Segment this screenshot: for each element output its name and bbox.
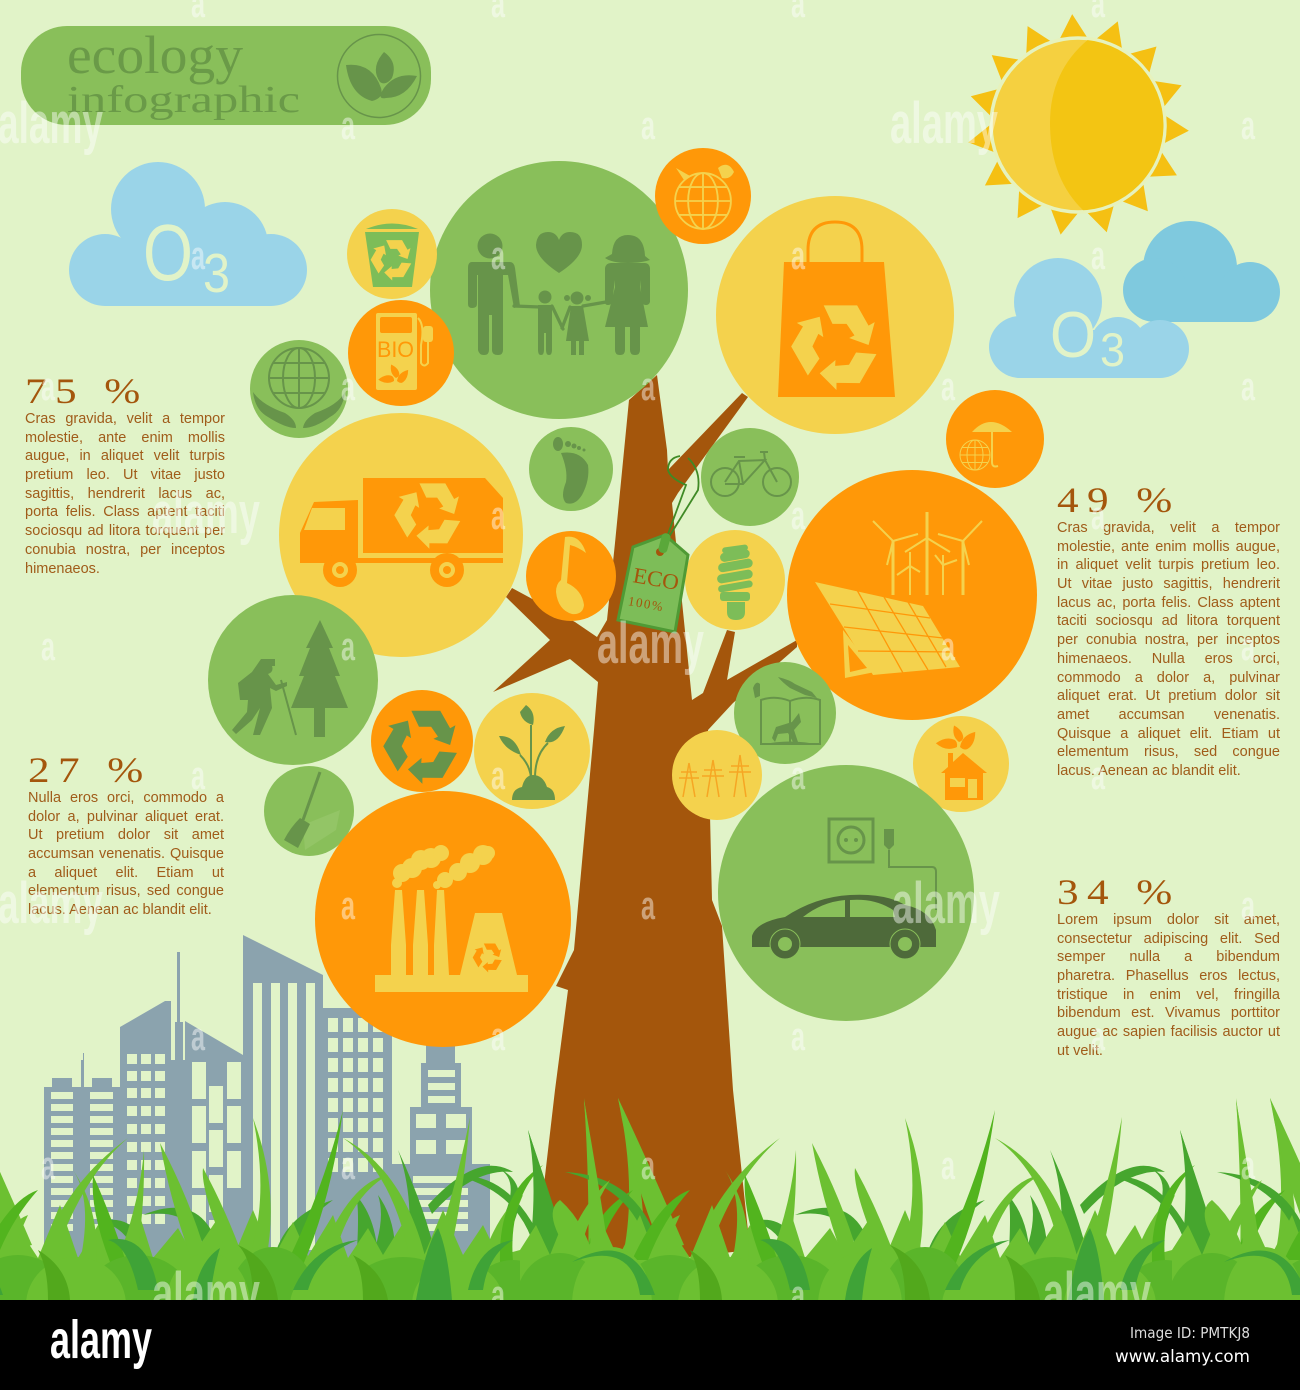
text block: 75 percent: 75 % (25, 371, 149, 411)
watermark overlay: a (41, 1144, 55, 1188)
eco tag: ECO (631, 562, 681, 595)
circle: bicycle (701, 428, 799, 526)
title pill (21, 25, 431, 125)
watermark overlay: a (941, 365, 955, 409)
text block: 75 percent: pretium leo. Ut vitae justo (25, 467, 225, 483)
watermark overlay: a (1241, 625, 1255, 669)
watermark overlay: alamy (152, 1261, 260, 1326)
watermark overlay: a (641, 104, 655, 148)
circle: hiker and tree (208, 595, 378, 765)
text block: 49 percent: aliquet erat. Ut pretium dolor sit (1057, 688, 1280, 704)
icon: leaves emblem (338, 34, 420, 118)
circle: footprint (529, 427, 613, 511)
circle: umbrella and globe (946, 390, 1044, 488)
cloud: ozone right (989, 258, 1189, 378)
text block: 49 percent: taciti sociosqu ad litora torquent (1057, 613, 1280, 629)
watermark overlay: a (491, 1015, 505, 1059)
circle: music note leaf (526, 531, 616, 621)
footer: url: www.alamy.com (1115, 1347, 1250, 1367)
circle: recycling truck (279, 413, 523, 657)
watermark overlay: a (791, 754, 805, 798)
text block: 27 percent: Ut pretium dolor sit amet (28, 827, 224, 843)
watermark overlay: a (341, 365, 355, 409)
watermark overlay: a (341, 104, 355, 148)
cloud: ozone right: 3 (1100, 323, 1125, 376)
text block: 49 percent: in aliquet velit turpis pretium leo. (1057, 557, 1280, 573)
text block: 27 percent: dolor a, pulvinar aliquet erat. (28, 809, 224, 825)
tree: trunk and branches (493, 375, 797, 1265)
text block: 49 percent: Quisque a aliquet elit. Etiam ut (1057, 726, 1280, 742)
watermark overlay: a (941, 625, 955, 669)
watermark overlay: a (641, 884, 655, 928)
watermark overlay: a (791, 234, 805, 278)
watermark overlay: a (41, 625, 55, 669)
footer bar (0, 1300, 1300, 1390)
text block: 34 percent: ut velit. (1057, 1043, 1103, 1059)
circle: energy saving bulb (685, 530, 785, 630)
text block: 49 percent: himenaeos. Nulla eros orci, (1057, 651, 1280, 667)
watermark overlay: a (491, 494, 505, 538)
eco tag: 100% (627, 593, 665, 614)
watermark overlay: a (1241, 365, 1255, 409)
text block: 27 percent: accumsan venenatis. Quisque (28, 846, 224, 862)
text block: 75 percent: conubia nostra, per inceptos (25, 542, 225, 558)
circle: recycling (371, 690, 473, 792)
watermark overlay: alamy (890, 91, 998, 156)
circle: globe in hands (250, 340, 348, 438)
circle: globe and wildlife (655, 148, 751, 244)
text block: 34 percent: semper nulla a bibendum (1057, 949, 1280, 965)
watermark overlay: a (191, 234, 205, 278)
circle: family (430, 161, 688, 419)
text block: 49 percent: commodo a dolor a, pulvinar (1057, 670, 1280, 686)
watermark overlay: alamy (0, 871, 103, 936)
watermark overlay: a (491, 234, 505, 278)
text block: 75 percent (25, 371, 225, 576)
text block: 34 percent: 34 % (1057, 872, 1181, 912)
circle: power pylons (672, 730, 762, 820)
watermark overlay: a (491, 1273, 505, 1317)
circle: electric car (718, 765, 974, 1021)
footer: logo: alamy (50, 1310, 152, 1370)
watermark overlay: a (1241, 884, 1255, 928)
text block: 49 percent: Cras gravida, velit a tempor (1057, 520, 1280, 536)
title: ecology: ecology (67, 25, 243, 85)
text block: 27 percent (28, 750, 224, 918)
text block: 75 percent: Cras gravida, velit a tempor (25, 411, 225, 427)
cloud: ozone left: 3 (203, 242, 230, 304)
sun (966, 13, 1200, 237)
city skyline (44, 935, 490, 1290)
watermark overlay: alamy (597, 611, 704, 676)
text block: 27 percent: Nulla eros orci, commodo a (28, 790, 224, 806)
circle: bio fuel: BIO (377, 337, 414, 362)
text block: 75 percent: sagittis, hendrerit lacus ac, (25, 486, 225, 502)
text block: 49 percent: per conubia nostra, per inceptos (1057, 632, 1280, 648)
watermark overlay: a (941, 1144, 955, 1188)
circle: solar panel and wind turbines (787, 470, 1037, 720)
text block: 27 percent: 27 % (28, 750, 152, 790)
watermark overlay: a (641, 365, 655, 409)
text block: 49 percent: 49 % (1057, 480, 1181, 520)
eco tag (618, 456, 699, 632)
watermark overlay: a (1091, 234, 1105, 278)
text block: 34 percent: augue ac sapien facilisis auctor ut (1057, 1024, 1280, 1040)
text block: 27 percent: a aliquet elit. Etiam ut (28, 865, 224, 881)
watermark overlay: a (41, 365, 55, 409)
watermark overlay: a (1241, 1144, 1255, 1188)
text block: 49 percent: molestie, ante enim mollis augue, (1057, 539, 1280, 555)
text block: 34 percent: consectetur adipiscing elit. Sed (1057, 931, 1280, 947)
circle: recycling bin (347, 209, 437, 299)
cloud: ozone left (69, 162, 307, 306)
watermark overlay: a (791, 1273, 805, 1317)
watermark overlay: alamy (152, 481, 260, 546)
watermark overlay: alamy (892, 871, 1000, 936)
watermark overlay: alamy (0, 91, 103, 156)
cloud: ozone left: O (143, 208, 193, 297)
text block: 34 percent: bibendum est. Vivamus porttitor (1057, 1005, 1280, 1021)
cloud: rear right (1123, 221, 1280, 322)
watermark overlay: a (1091, 494, 1105, 538)
text block: 34 percent: Lorem ipsum dolor sit amet, (1057, 912, 1280, 928)
text block: 49 percent: amet accumsan venenatis. (1057, 707, 1280, 723)
circle: bio fuel (348, 300, 454, 406)
watermark overlay: a (641, 1144, 655, 1188)
footer: image id: Image ID: PMTKJ8 (1130, 1324, 1250, 1342)
circle: sprout (474, 693, 590, 809)
text block: 34 percent (1057, 872, 1280, 1059)
text block: 49 percent: Ut vitae justo sagittis, hendrerit (1057, 576, 1280, 592)
watermark overlay: a (791, 494, 805, 538)
grass (0, 1098, 1300, 1363)
watermark overlay: a (191, 754, 205, 798)
text block: 49 percent (1057, 480, 1280, 779)
text block: 34 percent: tristique in enim vel, fringilla (1057, 987, 1280, 1003)
text block: 75 percent: augue, in aliquet velit turpis (25, 448, 225, 464)
watermark overlay: a (191, 1015, 205, 1059)
text block: 75 percent: himenaeos. (25, 560, 100, 576)
circle: eco house (913, 716, 1009, 812)
circle: broom (264, 766, 354, 856)
watermark overlay: a (1091, 1015, 1105, 1059)
title: infographic: infographic (67, 79, 300, 121)
watermark overlay: a (491, 754, 505, 798)
watermark overlay: a (341, 884, 355, 928)
watermark overlay: a (341, 1144, 355, 1188)
circle: factory (315, 791, 571, 1047)
text block: 27 percent: elementum risus, sed congue (28, 883, 224, 899)
text block: 49 percent: lacus ac, porta felis. Class aptent (1057, 595, 1280, 611)
watermark overlay: a (791, 1015, 805, 1059)
text block: 27 percent: lacus. Aenean ac blandit elit. (28, 902, 212, 918)
text block: 49 percent: lacus. Aenean ac blandit elit. (1057, 763, 1241, 779)
text block: 49 percent: elementum risus, sed congue (1057, 744, 1280, 760)
text block: 34 percent: pharetra. Phasellus eros lectus, (1057, 968, 1280, 984)
text block: 75 percent: porta felis. Class aptent taciti (25, 504, 225, 520)
watermark overlay: a (1091, 754, 1105, 798)
watermark overlay: a (1241, 104, 1255, 148)
cloud: ozone right: O (1050, 298, 1096, 371)
circle: shopping bag (716, 196, 954, 434)
text block: 75 percent: sociosqu ad litora torquent per (25, 523, 225, 539)
circle: nature book (734, 662, 836, 764)
watermark overlay: a (341, 625, 355, 669)
text block: 75 percent: molestie, ante enim mollis (25, 430, 225, 446)
